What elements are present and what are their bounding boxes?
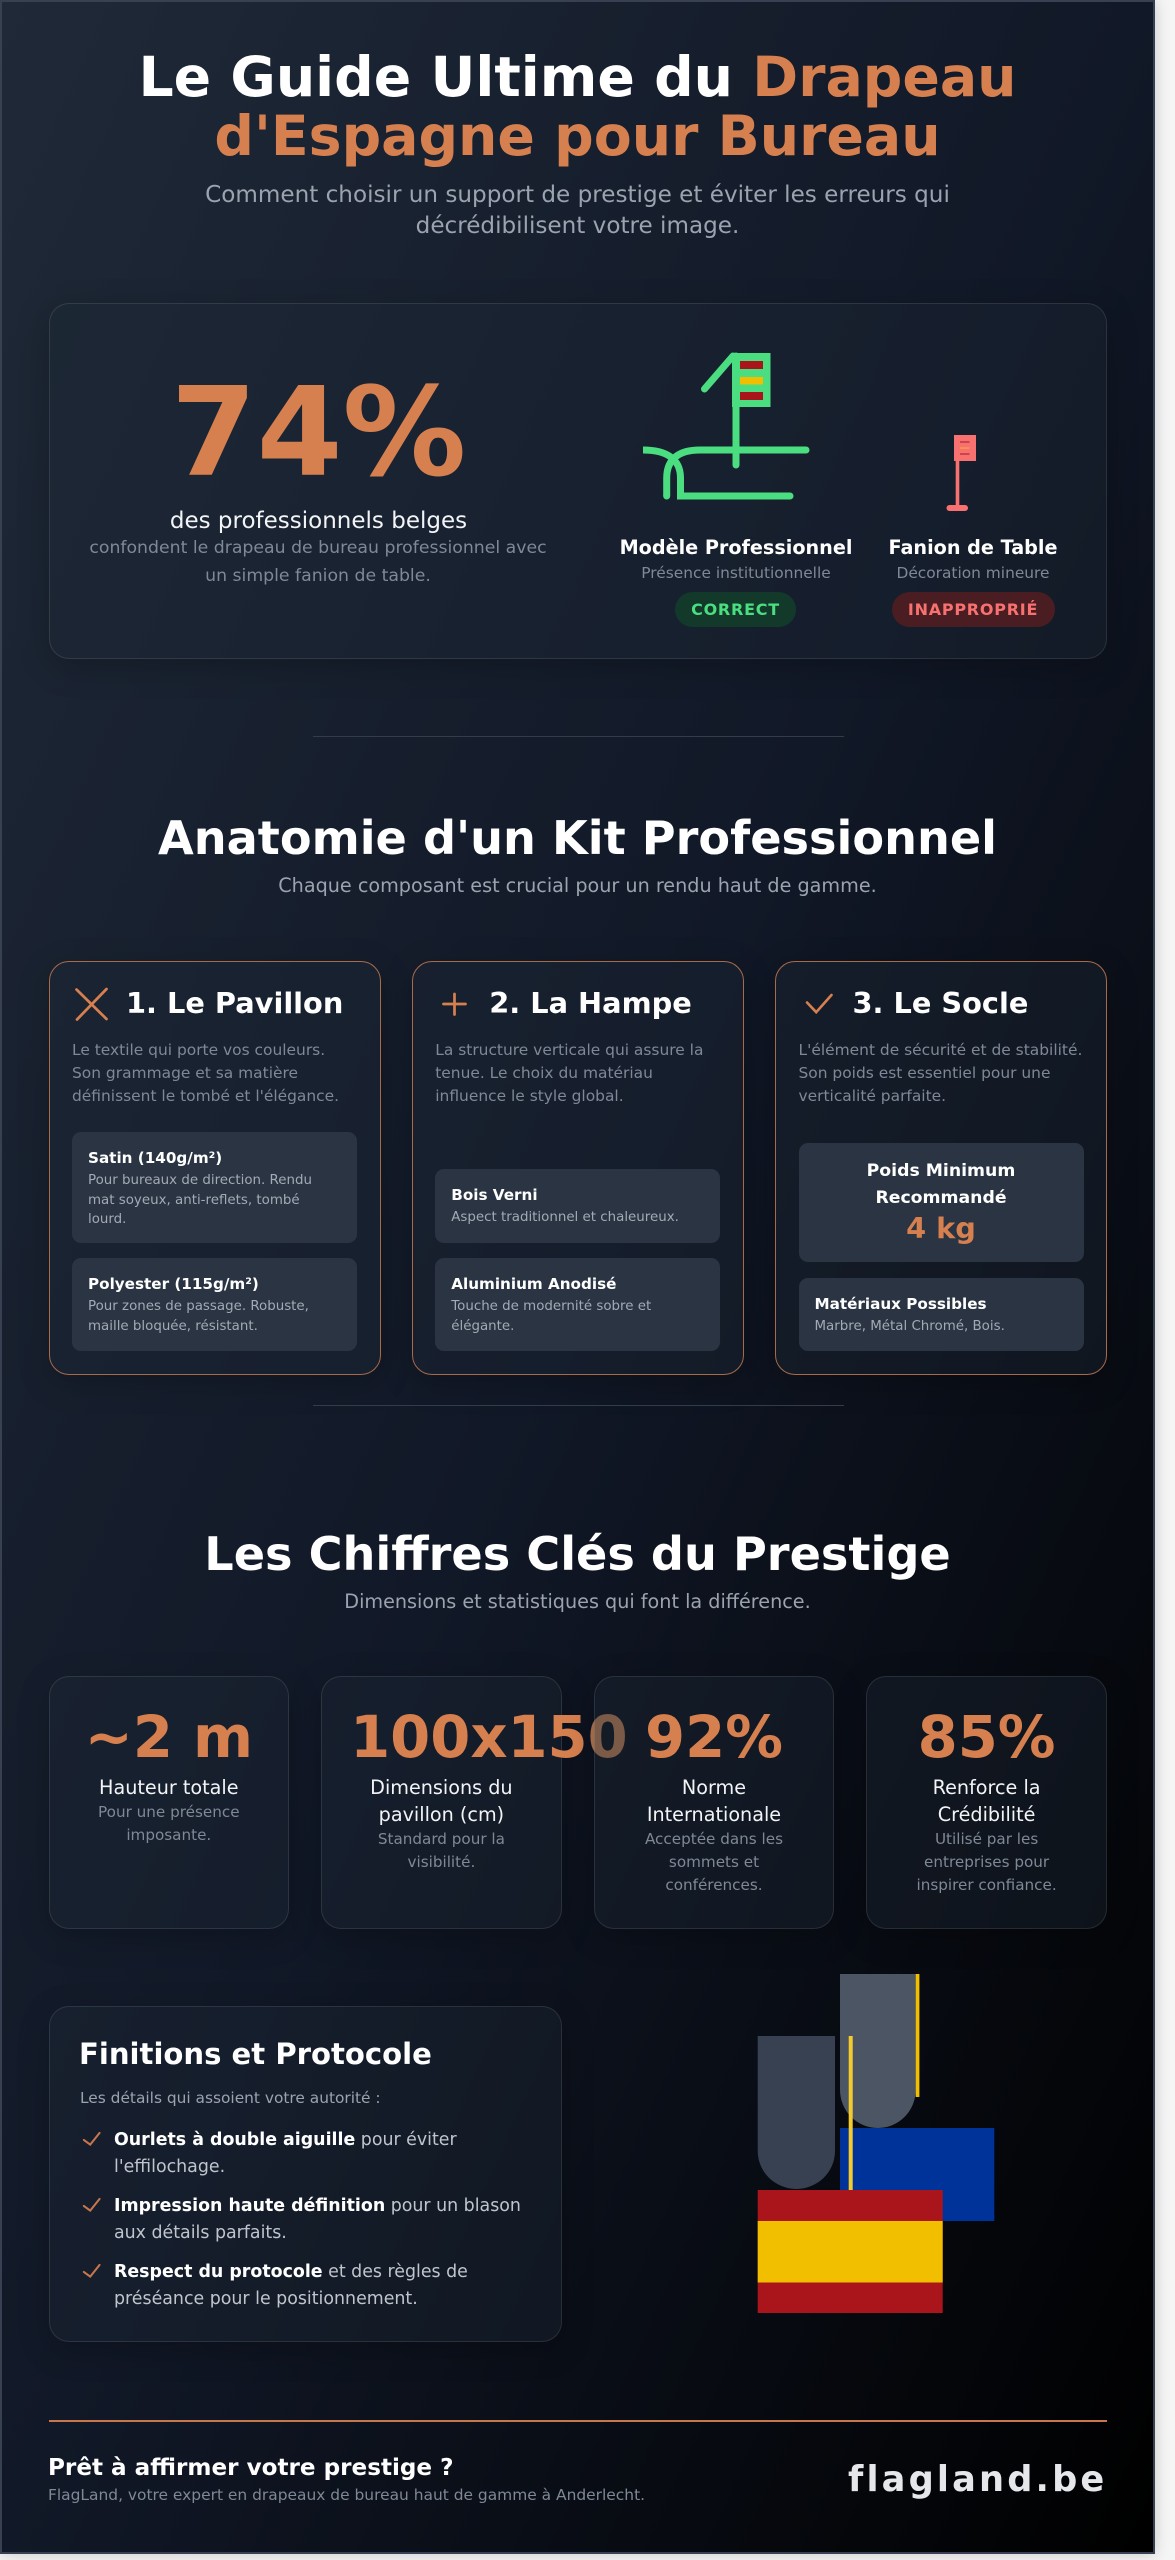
- note: entreprises pour: [924, 1853, 1049, 1871]
- description: le socle: Son poids est essentiel pour une: [798, 1064, 1050, 1082]
- big stat 74%: 74%: [171, 361, 466, 505]
- icon: cross: [75, 988, 108, 1021]
- stat card: dimensions: [321, 1676, 562, 1928]
- label: Dimensions du: [370, 1776, 513, 1799]
- option: satin: Satin (140g/m²): [88, 1149, 222, 1167]
- list item: protocol: [82, 2262, 468, 2309]
- note: [645, 1830, 783, 1894]
- list item: hems: l'effilochage.: [114, 2157, 225, 2177]
- brand: flagland.be: [848, 2459, 1107, 2500]
- hero stat description: un simple fanion de table.: [205, 566, 431, 586]
- callout: minimum weight: 4 kg: [906, 1210, 976, 1244]
- title: Le Guide Ultime du Drapeau: [138, 46, 1017, 110]
- note: Utilisé par les: [935, 1830, 1038, 1848]
- list item: printing: [82, 2196, 521, 2243]
- icon: professional flag: [643, 352, 810, 500]
- label: Crédibilité: [938, 1803, 1035, 1826]
- callout: minimum weight: Recommandé: [875, 1188, 1007, 1208]
- description: le pavillon: définissent le tombé et l'élégance.: [72, 1087, 339, 1105]
- list item: printing: Impression haute définition pour un blason: [114, 2196, 521, 2216]
- option: satin: mat soyeux, anti-reflets, tombé: [88, 1193, 300, 1208]
- label: professional model: Modèle Professionnel: [620, 536, 852, 559]
- callout: minimum weight: [798, 1143, 1084, 1262]
- option: aluminium: Touche de modernité sobre et: [451, 1299, 651, 1314]
- list item: protocol: préséance pour le positionnement.: [114, 2289, 418, 2309]
- heading: le pavillon: 1. Le Pavillon: [126, 986, 343, 1020]
- note: Acceptée dans les: [645, 1830, 783, 1848]
- option: polyester: maille bloquée, résistant.: [88, 1319, 258, 1334]
- icon: table pennant: [946, 435, 976, 511]
- grey shape: back-left: [758, 2036, 835, 2189]
- hero stat description: confondent le drapeau de bureau professionnel avec: [89, 538, 547, 558]
- intro text: Les détails qui assoient votre autorité :: [80, 2089, 381, 2107]
- heading: key figures: Les Chiffres Clés du Prestige: [204, 1527, 951, 1581]
- heading: finishes: Finitions et Protocole: [79, 2037, 432, 2071]
- subtitle: [205, 182, 950, 238]
- badge: inappropriate: [892, 592, 1054, 627]
- option: aluminium: Aluminium Anodisé: [451, 1275, 616, 1293]
- list item: hems: Ourlets à double aiguille pour éviter: [114, 2130, 457, 2150]
- note: [98, 1803, 240, 1844]
- blue rectangle: [840, 2128, 994, 2221]
- panel: 74% hero: [48, 303, 1107, 659]
- note: professional model: Présence institutionnelle: [641, 564, 831, 582]
- hero stat description: [89, 538, 547, 586]
- note: Pour une présence: [98, 1803, 240, 1821]
- title: d'Espagne pour Bureau: [214, 105, 941, 169]
- yellow pole: right: [916, 1974, 919, 2097]
- list item: hems: [82, 2130, 457, 2177]
- panel: la hampe: [412, 961, 744, 1374]
- badge: inappropriate: INAPPROPRIÉ: [908, 600, 1038, 619]
- spanish flag: [758, 2190, 943, 2313]
- description: la hampe: tenue. Le choix du matériau: [435, 1064, 653, 1082]
- label: pavillon (cm): [379, 1803, 504, 1826]
- label: [647, 1776, 781, 1826]
- description: le pavillon: [72, 1040, 339, 1105]
- subheading: key figures: Dimensions et statistiques qui font la différence.: [344, 1590, 811, 1613]
- value: ~2 m: [85, 1704, 253, 1771]
- subtitle: décrédibilisent votre image.: [416, 212, 739, 238]
- option: polyester: [72, 1258, 357, 1351]
- panel: le pavillon: [48, 961, 380, 1374]
- icon: check: [806, 994, 833, 1014]
- option: bois verni: Aspect traditionnel et chaleureux.: [451, 1210, 679, 1225]
- badge: correct: [675, 592, 796, 627]
- label: Norme: [682, 1776, 746, 1799]
- footer heading: Prêt à affirmer votre prestige ?: [48, 2455, 454, 2481]
- option: aluminium: élégante.: [451, 1319, 514, 1334]
- option: satin: lourd.: [88, 1212, 126, 1227]
- value: 100x150: [350, 1704, 628, 1771]
- yellow pole: left: [849, 2036, 853, 2190]
- option: materials: Marbre, Métal Chromé, Bois.: [814, 1319, 1005, 1334]
- heading: le socle: 3. Le Socle: [852, 986, 1028, 1020]
- label: Internationale: [647, 1803, 781, 1826]
- stat card: height: [48, 1676, 289, 1928]
- note: imposante.: [126, 1826, 211, 1844]
- option: bois verni: [435, 1169, 720, 1243]
- subheading: anatomy: Chaque composant est crucial pour un rendu haut de gamme.: [278, 874, 877, 897]
- subtitle: Comment choisir un support de prestige et éviter les erreurs qui: [205, 182, 950, 208]
- option: bois verni: Bois Verni: [451, 1186, 538, 1204]
- note: Standard pour la: [378, 1830, 505, 1848]
- panel: le socle: [775, 961, 1107, 1374]
- heading: la hampe: 2. La Hampe: [489, 986, 692, 1020]
- note: sommets et: [669, 1853, 759, 1871]
- description: la hampe: [435, 1040, 703, 1105]
- description: la hampe: La structure verticale qui assure la: [435, 1040, 703, 1058]
- note: conférences.: [665, 1876, 763, 1894]
- option: materials: Matériaux Possibles: [814, 1295, 987, 1313]
- option: satin: [72, 1132, 357, 1243]
- note: [378, 1830, 505, 1871]
- description: le socle: [798, 1040, 1082, 1105]
- option: satin: Pour bureaux de direction. Rendu: [88, 1173, 312, 1188]
- note: table pennant: Décoration mineure: [896, 564, 1050, 582]
- stat card: credibility: [866, 1676, 1107, 1928]
- list item: printing: aux détails parfaits.: [114, 2223, 287, 2243]
- label: table pennant: Fanion de Table: [888, 536, 1058, 559]
- footer rule: [48, 2420, 1107, 2422]
- description: la hampe: influence le style global.: [435, 1087, 624, 1105]
- note: inspirer confiance.: [916, 1876, 1057, 1894]
- heading: anatomy: Anatomie d'un Kit Professionnel: [158, 811, 997, 865]
- option: aluminium: [435, 1258, 720, 1351]
- option: polyester: Polyester (115g/m²): [88, 1275, 259, 1293]
- title: [138, 46, 1017, 169]
- description: le pavillon: Son grammage et sa matière: [72, 1064, 298, 1082]
- description: le socle: L'élément de sécurité et de stabilité.: [798, 1040, 1082, 1058]
- option: materials: [798, 1278, 1084, 1351]
- value: 92%: [645, 1704, 783, 1771]
- list item: protocol: Respect du protocole et des règles de: [114, 2262, 468, 2282]
- label: Hauteur totale: [99, 1776, 239, 1799]
- note: [916, 1830, 1057, 1894]
- grey shape: back-right: [840, 1974, 916, 2128]
- value: 85%: [918, 1704, 1056, 1771]
- hero stat label: des professionnels belges: [170, 508, 467, 534]
- badge: correct: CORRECT: [691, 600, 780, 619]
- icon: plus: [442, 992, 467, 1016]
- illustration: flag kit: [758, 1974, 994, 2313]
- stat card: international norm: [594, 1676, 834, 1928]
- callout: minimum weight: Poids Minimum: [867, 1160, 1015, 1180]
- option: polyester: Pour zones de passage. Robuste,: [88, 1299, 309, 1314]
- label: [933, 1776, 1041, 1826]
- description: le socle: verticalité parfaite.: [798, 1087, 946, 1105]
- description: le pavillon: Le textile qui porte vos couleurs.: [72, 1040, 325, 1058]
- label: [370, 1776, 513, 1826]
- label: Renforce la: [933, 1776, 1041, 1799]
- panel: finishes and protocol: [48, 2006, 562, 2342]
- note: visibilité.: [408, 1853, 475, 1871]
- footer text: FlagLand, votre expert en drapeaux de bureau haut de gamme à Anderlecht.: [48, 2486, 645, 2504]
